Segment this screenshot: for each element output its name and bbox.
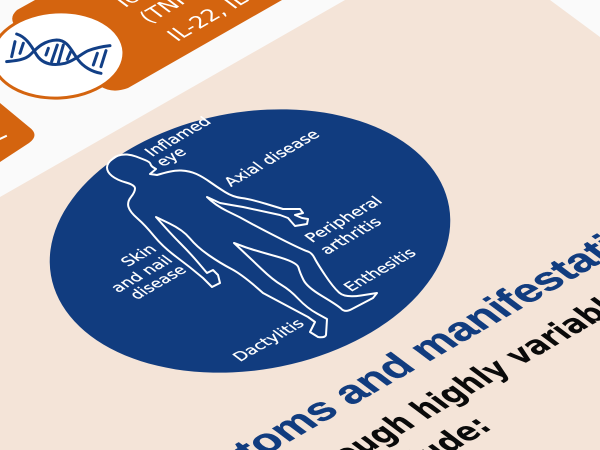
text: body labels: Enthesitis [340, 246, 420, 294]
icon: DNA badge [0, 9, 126, 101]
text: body labels: Skin [117, 242, 161, 269]
text: mediator list [109, 0, 253, 45]
text: body labels: eye [152, 145, 191, 169]
text: body labels [107, 114, 420, 364]
text: body labels: disease [126, 263, 191, 302]
text: body labels: Peripheral [301, 194, 387, 245]
panel: navy circle [29, 80, 471, 402]
text: body labels: Inflamed [141, 114, 215, 159]
text: body labels: arthritis [316, 215, 386, 257]
icon: human body outline [107, 154, 377, 337]
panel: orange left box [0, 103, 35, 162]
text: body labels: Dactylitis [229, 316, 308, 364]
text: body labels: and nail [107, 253, 177, 295]
panel: orange mediator box [12, 0, 282, 91]
icon: DNA helix [7, 34, 110, 73]
text: body labels: Axial disease [220, 127, 324, 189]
